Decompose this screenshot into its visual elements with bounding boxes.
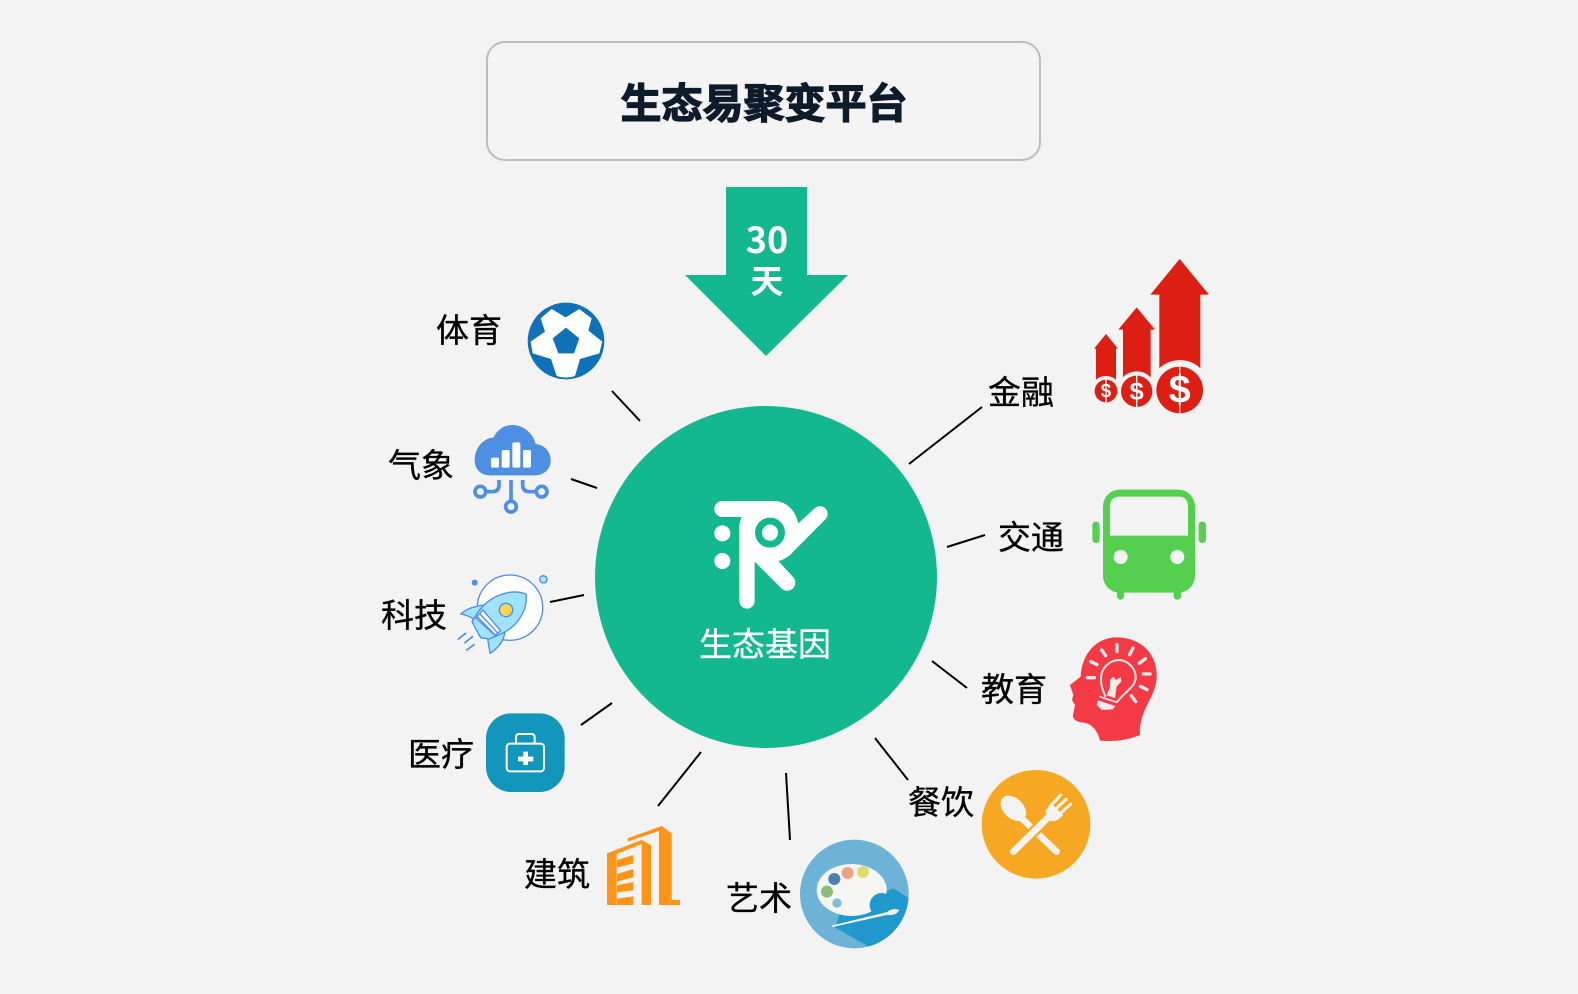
item: transport — [998, 490, 1206, 600]
icon: rising dollar arrows: $ — [1101, 380, 1112, 401]
item: weather: 气象 — [388, 447, 454, 484]
icon: palette — [800, 840, 912, 948]
item: art — [726, 840, 912, 948]
item: education: 教育 — [981, 671, 1047, 708]
icon: logo — [714, 501, 828, 609]
item: weather — [388, 425, 551, 512]
item: finance: 金融 — [988, 374, 1054, 411]
icon: rocket — [458, 575, 547, 653]
connector lines — [550, 391, 985, 840]
item: medical — [408, 713, 565, 792]
arrow: 30 days — [685, 187, 848, 356]
central circle: ecological genes — [595, 406, 937, 748]
icon: cloud data — [475, 425, 551, 512]
icon: first aid kit — [486, 713, 565, 792]
item: construction — [524, 826, 680, 905]
icon: rising dollar arrows: $ — [1130, 378, 1144, 406]
item: technology: 科技 — [381, 597, 447, 634]
item: education — [981, 637, 1157, 741]
icon: bus — [1092, 490, 1206, 600]
title box — [487, 42, 1040, 160]
item: medical: 医疗 — [408, 736, 474, 773]
item: technology — [381, 575, 547, 653]
arrow: 30 days: 天 — [750, 263, 784, 300]
item: finance — [988, 259, 1209, 413]
item: art: 艺术 — [726, 880, 792, 917]
item: sports — [436, 303, 604, 379]
item: catering — [908, 770, 1090, 879]
icon: football — [528, 303, 604, 379]
item: transport: 交通 — [998, 519, 1064, 556]
item: construction: 建筑 — [524, 856, 590, 893]
item: catering: 餐饮 — [908, 784, 974, 821]
icon: building — [607, 826, 680, 905]
item: sports: 体育 — [436, 312, 502, 349]
icon: spoon and fork — [982, 770, 1090, 879]
icon: rising dollar arrows: $ — [1169, 368, 1191, 412]
icon: head with lightbulb — [1070, 637, 1157, 741]
center label: 生态基因 — [699, 626, 831, 663]
title box: 生态易聚变平台 — [620, 81, 908, 127]
arrow: 30 days: 30 — [746, 212, 788, 264]
icon: rising dollar arrows — [1094, 259, 1209, 413]
